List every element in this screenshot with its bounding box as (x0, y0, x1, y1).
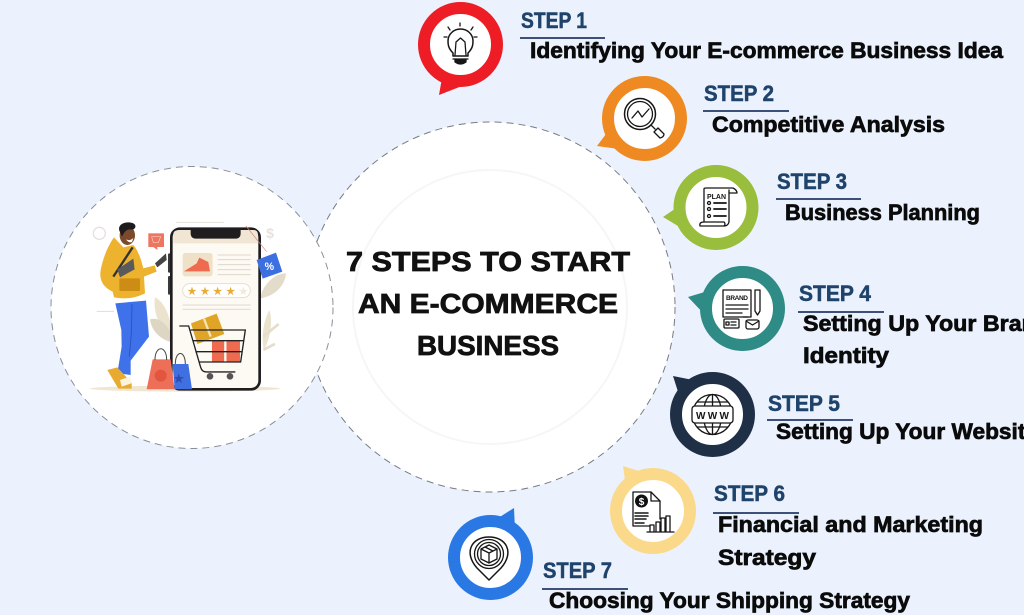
heading (346, 246, 630, 361)
text: step 3: Business Planning (785, 200, 980, 225)
illustration: shopper with phone and cart: % (265, 261, 275, 273)
icon: step 5 web badge: WWW (696, 411, 730, 422)
illustration: shopper with phone and cart: ★ (226, 286, 235, 297)
text: step 4: Identity (803, 343, 890, 368)
icon: step 6 finance badge: $ (639, 497, 645, 508)
text: step 5 (767, 391, 1024, 444)
text: step 6: Strategy (718, 545, 817, 570)
icon: step 4 brand badge: BRAND (726, 295, 748, 302)
illustration: shopper with phone and cart (90, 222, 286, 392)
text: step 3: STEP 3 (777, 169, 847, 194)
text: step 2: STEP 2 (704, 81, 774, 106)
text: step 1: STEP 1 (521, 8, 587, 33)
text: step 2: Competitive Analysis (712, 112, 945, 137)
illustration: shopper with phone and cart: $ (266, 225, 274, 241)
text: step 7 (542, 558, 911, 613)
text: step 1: Identifying Your E-commerce Business Idea (530, 38, 1004, 63)
icon: step 3 plan badge (663, 171, 752, 244)
panel: illustration circle (51, 166, 333, 448)
text: step 5: STEP 5 (768, 391, 840, 416)
illustration: shopper with phone and cart: ★ (174, 374, 184, 386)
illustration: shopper with phone and cart: ★ (201, 286, 210, 297)
text: step 6: STEP 6 (714, 481, 785, 506)
heading: AN E-COMMERCE (358, 288, 618, 319)
icon: step 3 plan badge: PLAN (707, 194, 726, 201)
icon: step 6 finance badge (616, 466, 690, 548)
icon: step 7 shipping badge (454, 508, 527, 594)
illustration: shopper with phone and cart: ★ (188, 286, 197, 297)
text: step 2 (703, 81, 945, 137)
heading: 7 STEPS TO START (346, 246, 630, 277)
text: step 3 (776, 169, 980, 225)
text: step 6 (713, 481, 983, 570)
text: step 7: STEP 7 (543, 558, 612, 583)
illustration: shopper with phone and cart: ★ (213, 286, 222, 297)
panel: center title circle (305, 122, 675, 492)
text: step 1 (520, 8, 1004, 63)
icon: step 2 magnifier badge (597, 82, 681, 155)
text: step 5: Setting Up Your Website (776, 419, 1024, 444)
icon: step 1 bulb badge (424, 8, 497, 95)
text: step 4 (798, 281, 1024, 368)
icon: step 4 brand badge (688, 272, 779, 345)
icon: step 5 web badge (673, 376, 749, 451)
illustration: shopper with phone and cart: ★ (239, 286, 248, 297)
text: step 6: Financial and Marketing (718, 512, 983, 537)
text: step 4: STEP 4 (799, 281, 872, 306)
heading: BUSINESS (417, 330, 559, 361)
text: step 7: Choosing Your Shipping Strategy (549, 588, 911, 613)
